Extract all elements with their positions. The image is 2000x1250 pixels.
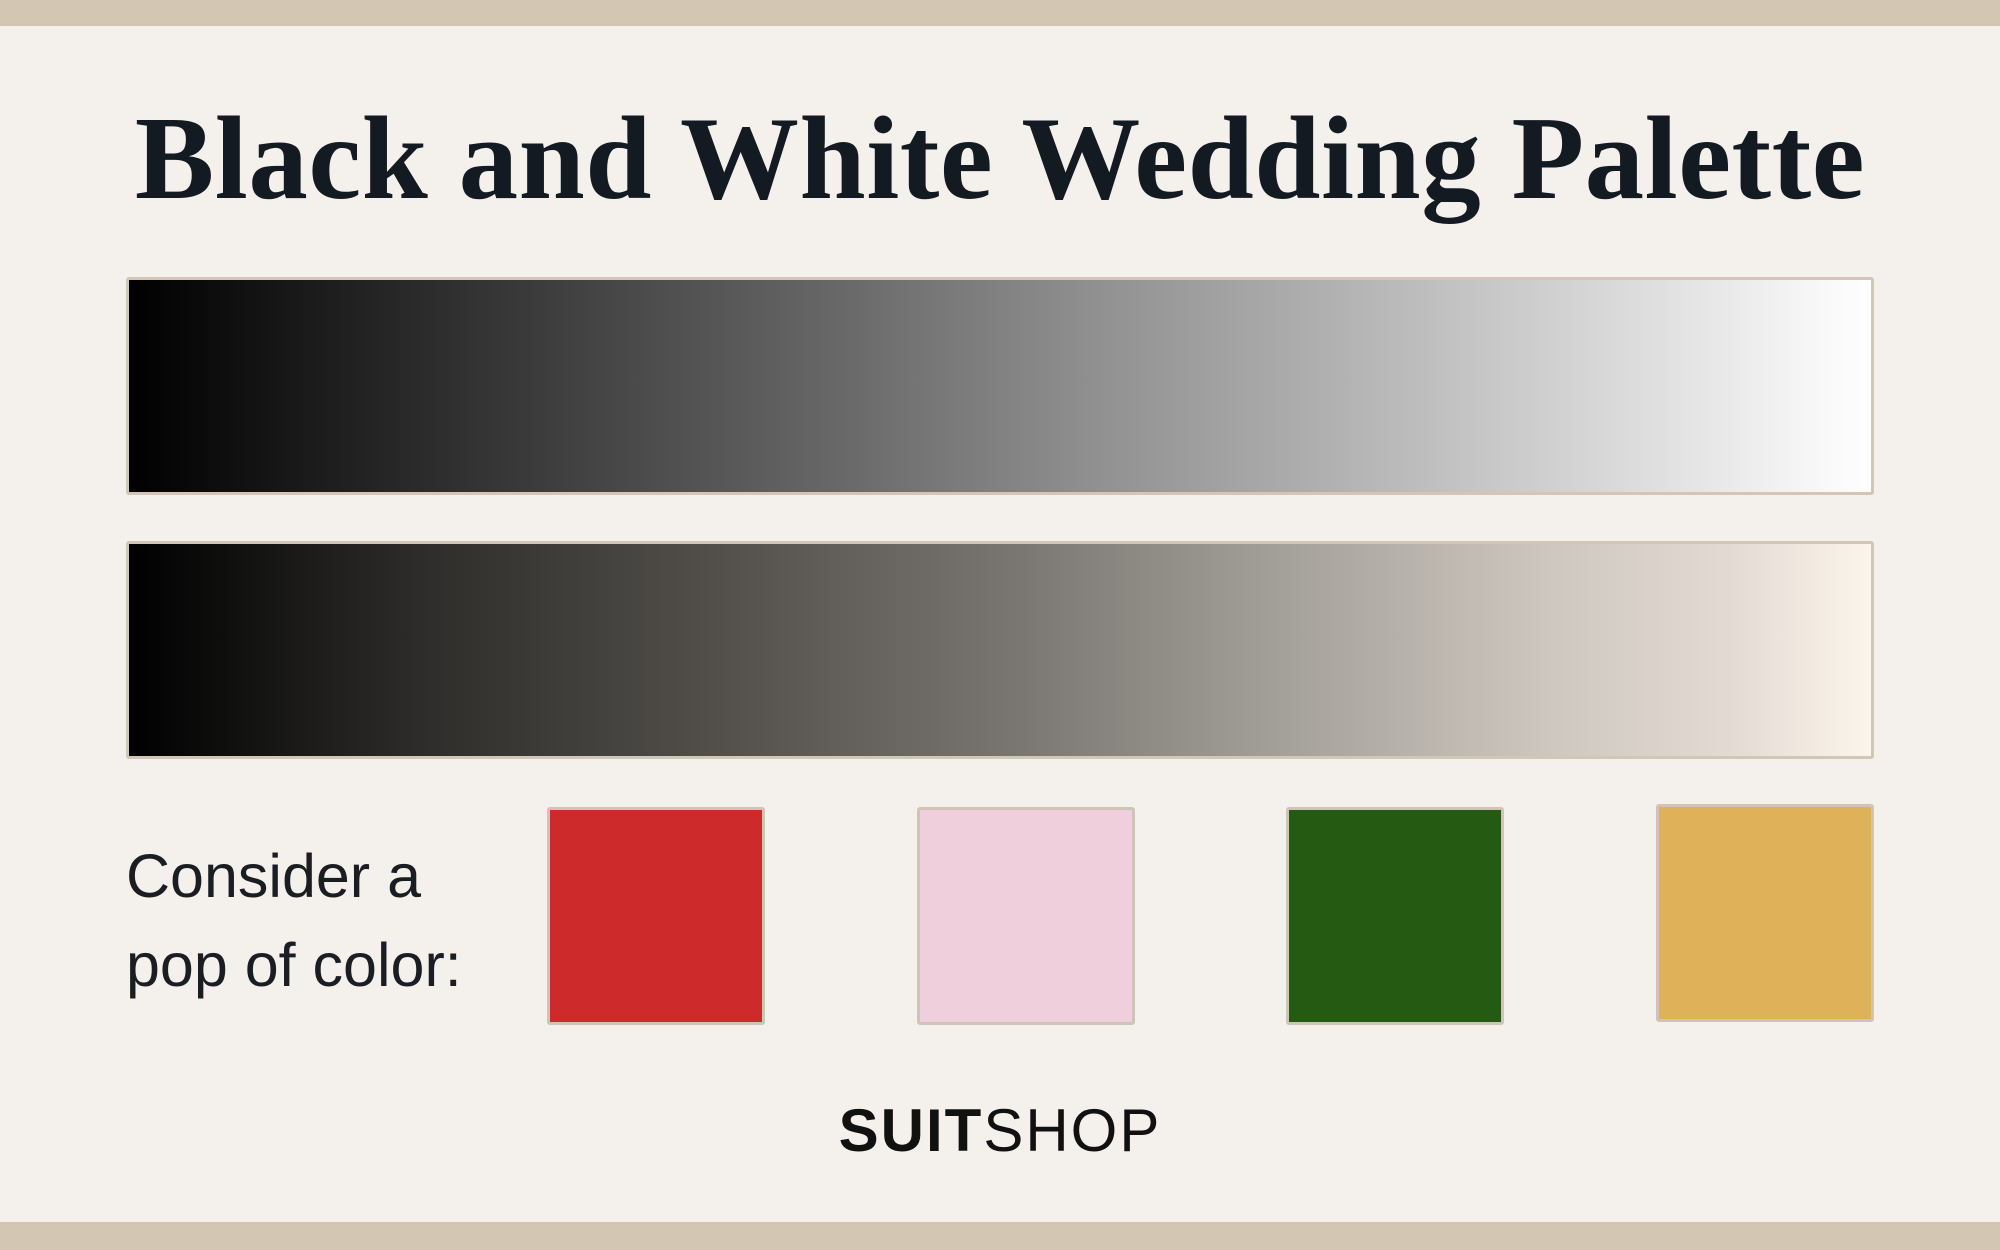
logo: SUITSHOP: SUITSHOP [839,1097,1161,1164]
swatch: red [547,807,765,1025]
swatch: gold [1656,804,1874,1022]
text: consider a pop of color: Consider a [126,842,421,910]
text: consider a pop of color: pop of color: [126,931,462,999]
top border band [0,0,2000,26]
gradient bar: black to white [126,277,1874,495]
gradient bar: black to ivory [126,541,1874,759]
text: consider a pop of color [126,842,462,999]
title: Black and White Wedding Palette [135,92,1865,224]
swatch: pink [917,807,1135,1025]
bottom border band [0,1222,2000,1250]
swatch: green [1286,807,1504,1025]
